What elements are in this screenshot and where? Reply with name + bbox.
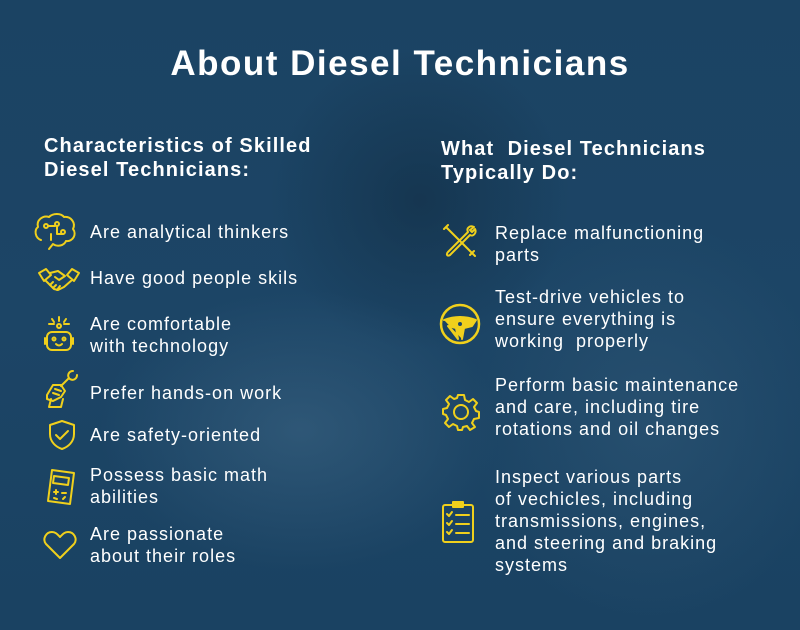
icon: shield — [49, 420, 75, 450]
heading: what they do — [441, 138, 706, 184]
heading: characteristics — [44, 135, 312, 181]
text — [495, 223, 704, 265]
text: Test-drive vehicles to — [495, 287, 685, 307]
text: Prefer hands-on work — [90, 383, 282, 403]
heading: characteristics: Diesel Technicians: — [44, 159, 250, 181]
text: parts — [495, 245, 540, 265]
title: About Diesel Technicians — [170, 44, 630, 83]
text — [495, 287, 685, 351]
text — [495, 375, 739, 439]
icon: checklist — [442, 501, 474, 543]
text: working properly — [495, 331, 649, 351]
heading: characteristics: Characteristics of Skilled — [44, 135, 312, 157]
text: Replace malfunctioning — [495, 223, 704, 243]
heading: what they do: Typically Do: — [441, 162, 578, 184]
text: systems — [495, 555, 568, 575]
icon: handshake — [38, 268, 80, 291]
heading: what they do: What Diesel Technicians — [441, 138, 706, 160]
icon: calculator — [47, 469, 75, 505]
text — [90, 465, 268, 507]
text: and care, including tire — [495, 397, 700, 417]
text: Perform basic maintenance — [495, 375, 739, 395]
text: of vechicles, including — [495, 489, 693, 509]
icon: robot — [44, 316, 74, 351]
text: Possess basic math — [90, 465, 268, 485]
text: Inspect various parts — [495, 467, 682, 487]
icon: heart — [43, 531, 77, 559]
text: Are safety-oriented — [90, 425, 261, 445]
panel: characteristics list — [34, 213, 298, 566]
text: Are analytical thinkers — [90, 222, 289, 242]
icon: gear — [442, 394, 480, 431]
text: Are comfortable — [90, 314, 232, 334]
text — [90, 524, 236, 566]
icon: brain — [34, 213, 76, 250]
text: Are passionate — [90, 524, 224, 544]
icon: hand with wrench — [46, 370, 78, 408]
text: rotations and oil changes — [495, 419, 720, 439]
icon: tools — [443, 224, 477, 257]
text: with technology — [90, 336, 229, 356]
text: about their roles — [90, 546, 236, 566]
icon: steering wheel — [440, 304, 480, 344]
text: abilities — [90, 487, 159, 507]
text: ensure everything is — [495, 309, 676, 329]
text: Have good people skils — [90, 268, 298, 288]
panel: tasks list — [440, 223, 739, 575]
text — [495, 467, 717, 575]
text: and steering and braking — [495, 533, 717, 553]
text: transmissions, engines, — [495, 511, 706, 531]
text — [90, 314, 232, 356]
